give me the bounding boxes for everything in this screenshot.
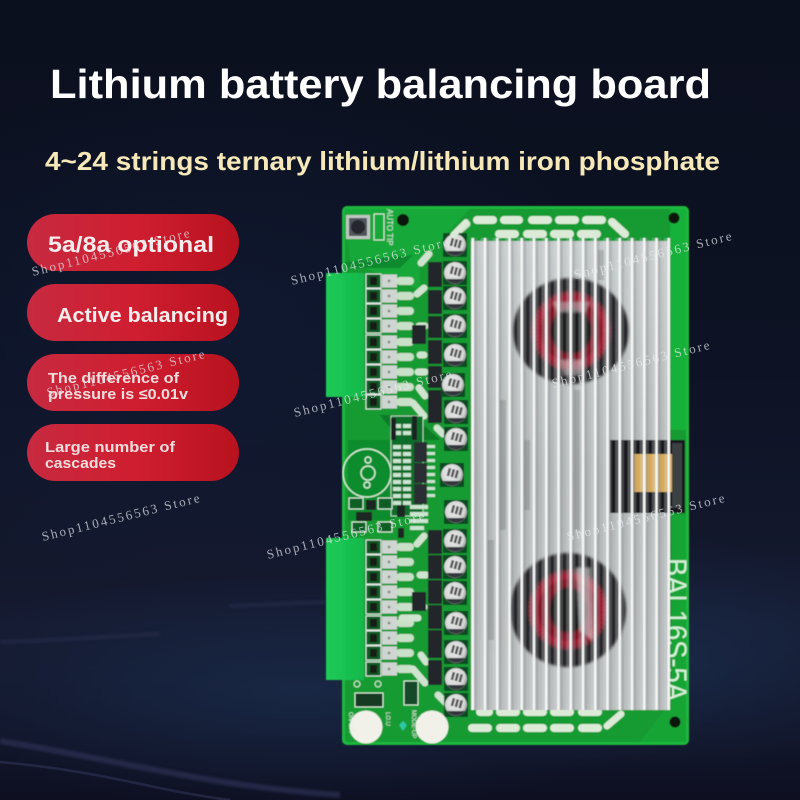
white button right xyxy=(416,710,448,744)
transformer xyxy=(610,440,685,513)
mode label: MODE-UP xyxy=(410,710,416,738)
capacitor column upper xyxy=(440,233,468,487)
bottom left component cluster xyxy=(354,681,418,731)
upper resistor row xyxy=(366,274,414,409)
aluminium heat sink xyxy=(471,238,685,710)
store watermarks: Shop1104556563 Store xyxy=(572,228,733,282)
lower toroid xyxy=(510,553,626,667)
heat sink fins xyxy=(471,238,670,710)
pcb base xyxy=(342,206,689,745)
bottom pads xyxy=(468,708,621,732)
mounting hole bottom right xyxy=(670,716,680,728)
capacitor column lower xyxy=(443,500,468,717)
diagonal traces xyxy=(402,224,467,703)
store watermarks: Shop1104556563 Store xyxy=(289,234,450,288)
store watermarks: Shop1104556563 Store xyxy=(565,490,726,544)
feature pill: cascades xyxy=(27,424,239,481)
heat sink base xyxy=(471,241,670,710)
store watermarks: Shop1104556563 Store xyxy=(45,346,206,400)
subtitle: 4~24 strings ternary lithium/lithium iron phosphate xyxy=(45,146,720,176)
upper toroid xyxy=(513,278,629,384)
lou label: LO.U xyxy=(384,712,390,726)
silkscreen buzzer circle xyxy=(343,449,391,497)
feature pill: cascades: Large number of xyxy=(45,439,176,456)
feature pill: active balancing: Active balancing xyxy=(57,305,228,327)
title: Lithium battery balancing board xyxy=(50,61,711,107)
store watermarks xyxy=(30,225,733,562)
lower left component cluster xyxy=(349,498,428,538)
feature pill: active balancing xyxy=(27,284,239,341)
tact switch xyxy=(346,214,384,240)
feature pill: cascades: cascades xyxy=(45,455,116,472)
feature pill: pressure difference: The difference of xyxy=(48,370,180,387)
circuit board xyxy=(326,206,692,745)
feature pill: 5a/8a optional: 5a/8a optional xyxy=(48,232,214,257)
feature pill: pressure difference xyxy=(27,354,239,411)
store watermarks: Shop1104556563 Store xyxy=(30,225,191,279)
pcb copper pour xyxy=(345,209,686,742)
heat sink smudges xyxy=(488,250,604,640)
mounting hole top xyxy=(397,214,409,226)
mosfet column lower xyxy=(412,530,442,685)
on-off label: ON-OFF xyxy=(347,712,353,735)
green connector lower xyxy=(326,538,364,680)
white button left xyxy=(350,710,382,744)
mosfet column upper xyxy=(412,262,442,423)
mounting hole top right xyxy=(668,212,680,224)
feature pill: pressure difference: pressure is ≤0.01v xyxy=(48,386,189,403)
store watermarks: Shop1104556563 Store xyxy=(292,366,453,420)
auto tip silkscreen: AUTO TIP xyxy=(385,209,394,246)
top pads xyxy=(453,216,625,238)
model label: BAL16S-5A xyxy=(659,558,692,701)
store watermarks: Shop1104556563 Store xyxy=(550,337,711,391)
feature pill: 5a/8a optional xyxy=(27,214,239,271)
green connector upper xyxy=(326,273,364,397)
store watermarks: Shop1104556563 Store xyxy=(265,508,426,562)
control circuitry xyxy=(391,416,435,516)
lower resistor row xyxy=(366,540,414,676)
store watermarks: Shop1104556563 Store xyxy=(40,490,201,544)
